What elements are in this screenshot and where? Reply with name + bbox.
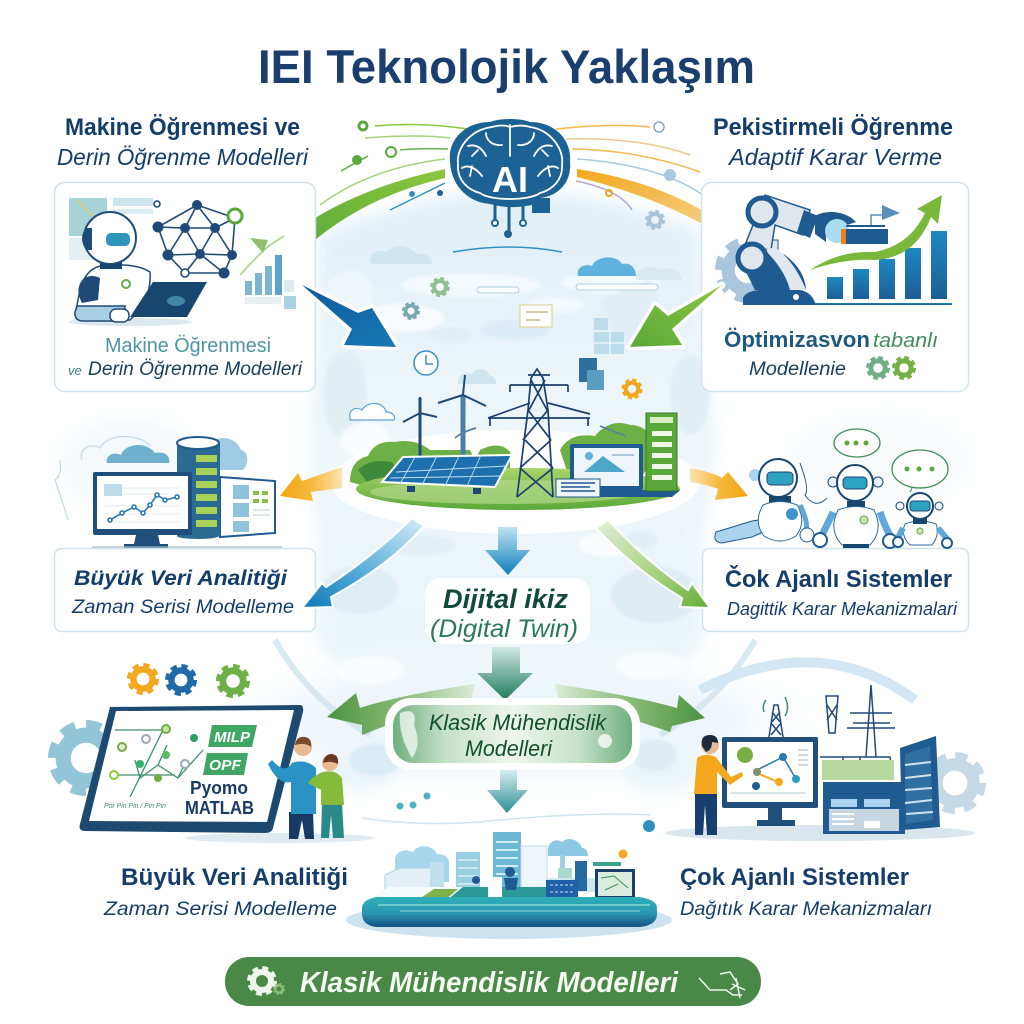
heading: reinforcement learning bbox=[713, 114, 953, 170]
illustration: grid operations desk bbox=[665, 685, 980, 841]
card text: modelling: Modellenie bbox=[749, 359, 846, 380]
buildings bbox=[385, 832, 635, 900]
MILP badge: MILP bbox=[214, 729, 251, 746]
bottom left caption bbox=[103, 864, 348, 920]
icons: clock, cloud, sun, docs above center scene bbox=[350, 351, 640, 420]
footer text: Klasik Mühendislik Modelleri bbox=[300, 967, 679, 999]
robot 1 bbox=[715, 459, 814, 543]
arrow: wide green to left bbox=[327, 684, 475, 735]
title: IEI Teknolojik Yaklaşım bbox=[258, 40, 755, 93]
panel: multi-agent card: Dagittik Karar Mekanizmalari bbox=[727, 599, 958, 619]
towers bbox=[763, 685, 895, 778]
icons: twin gears bbox=[868, 358, 914, 378]
connector lines around brain bbox=[320, 122, 703, 210]
pale gear bbox=[930, 758, 980, 808]
tablet bbox=[80, 705, 303, 833]
panel: big data card: Büyük Veri Analitiği bbox=[74, 567, 288, 590]
speech bubble bbox=[892, 450, 948, 492]
bushes bbox=[350, 423, 658, 490]
people bbox=[185, 737, 375, 843]
panel: machine learning card bbox=[54, 182, 316, 392]
field tile bbox=[362, 887, 463, 905]
illustration: optimization tablet bbox=[56, 666, 375, 843]
arrow: orange to big data bbox=[280, 467, 342, 501]
dashboard backdrop bbox=[69, 198, 153, 260]
card subtitle: Derin Öğrenme Modelleri bbox=[88, 359, 303, 380]
bar chart: growth bbox=[743, 231, 952, 305]
arrow: wide green to right bbox=[555, 684, 705, 732]
solar panel bbox=[382, 455, 512, 494]
card subtitle: ve bbox=[68, 363, 82, 378]
panel: big data card bbox=[54, 548, 316, 632]
arrow: blue curved to big data bbox=[302, 518, 424, 608]
panel: big data illustration bbox=[55, 436, 282, 549]
card text: optimization: tabanlı bbox=[873, 330, 938, 352]
arrow: orange to multi-agent bbox=[690, 468, 748, 500]
green arc left bbox=[315, 169, 445, 240]
bar chart: mini bbox=[240, 236, 296, 309]
panel: big data card: Zaman Serisi Modelleme bbox=[71, 597, 294, 618]
icon: footer tools bbox=[699, 972, 745, 998]
illustration: smart city platform bbox=[346, 832, 672, 939]
panel: classic engineering models pill bbox=[385, 698, 640, 770]
heading: reinforcement learning: Pekistirmeli Öğrenme bbox=[713, 114, 953, 141]
bottom left caption: Büyük Veri Analitiği bbox=[121, 864, 348, 891]
gears row bbox=[130, 666, 247, 695]
arrow: blue down to digital twin bbox=[485, 527, 530, 575]
heading: machine learning: Derin Öğrenme Modelleri bbox=[57, 144, 309, 170]
ground bbox=[356, 468, 680, 510]
robot 3 bbox=[893, 493, 952, 548]
icons: three collaborating robots bbox=[715, 429, 952, 548]
background: central pale globe bbox=[60, 192, 970, 795]
arrow: teal down to city bbox=[487, 770, 528, 813]
bottom left caption: Zaman Serisi Modelleme bbox=[103, 899, 337, 920]
robot 2 bbox=[813, 465, 897, 548]
arrow: green down to classic models bbox=[477, 647, 533, 700]
panel: reinforcement learning card bbox=[702, 182, 968, 392]
people bbox=[472, 867, 518, 899]
center scene: energy island bbox=[350, 369, 680, 510]
background clouds and small icons under brain bbox=[370, 212, 682, 354]
heading: reinforcement learning: Adaptif Karar Verme bbox=[727, 144, 942, 170]
MILP badge bbox=[208, 725, 257, 747]
turbine 2 bbox=[438, 375, 486, 456]
panel: classic engineering models pill: Klasik Mühendislik bbox=[429, 710, 607, 735]
icon: AI brain: AI bbox=[492, 159, 528, 200]
footer banner bbox=[225, 957, 761, 1006]
icon: robot with laptop bbox=[68, 212, 207, 326]
laptop and data block bbox=[556, 444, 680, 497]
monitor with line chart bbox=[93, 472, 192, 548]
rack bbox=[220, 477, 275, 537]
monitor with network bbox=[722, 737, 818, 826]
arrow: green curved to multi-agent bbox=[596, 520, 710, 608]
decorative nodes above city bbox=[362, 792, 655, 858]
speech bubble bbox=[834, 429, 880, 457]
icon: robot arm bbox=[738, 195, 900, 305]
teal plaza bbox=[445, 887, 546, 898]
bottom right caption bbox=[680, 864, 932, 920]
orange arc right bbox=[577, 169, 705, 225]
center scene: white halo bbox=[330, 430, 700, 534]
icon: neural network bbox=[152, 200, 242, 278]
MATLAB label: MATLAB bbox=[185, 798, 254, 818]
panel: multi-agent card bbox=[702, 548, 968, 632]
Pyomo label: Pyomo bbox=[190, 778, 248, 798]
icon: AI brain bbox=[450, 119, 570, 252]
terminal box bbox=[823, 782, 905, 834]
platform bbox=[362, 897, 657, 927]
panel: multi-agent card: Čok Ajanlı Sistemler bbox=[725, 565, 952, 593]
pale gear bbox=[56, 728, 116, 788]
label: digital twin: Dijital ikiz bbox=[443, 584, 568, 614]
arrow: growth trend bbox=[810, 195, 942, 270]
server cylinder bbox=[177, 437, 220, 539]
transmission tower bbox=[455, 369, 626, 497]
OPF badge: OPF bbox=[209, 757, 242, 774]
arrow: green into twin from top right bbox=[630, 285, 722, 347]
label: digital twin bbox=[425, 578, 590, 644]
person bbox=[694, 735, 743, 835]
network graph bbox=[110, 725, 203, 797]
green status rack bbox=[646, 413, 677, 491]
heading: machine learning: Makine Öğrenmesi ve bbox=[65, 114, 300, 141]
bottom right caption: Dağıtık Karar Mekanizmaları bbox=[680, 899, 932, 920]
card text: optimization bbox=[724, 327, 938, 352]
card text: optimization: Öptimizasvon bbox=[724, 327, 870, 352]
card text: Makine Öğrenmesi bbox=[105, 335, 271, 357]
OPF badge bbox=[203, 753, 248, 775]
turbine 1 bbox=[403, 397, 437, 468]
panel: classic engineering models pill: Modelleri bbox=[465, 736, 553, 761]
icon: pale gear behind arm bbox=[722, 244, 774, 296]
clouds bbox=[55, 436, 247, 520]
heading: machine learning bbox=[57, 114, 309, 170]
bottom right caption: Çok Ajanlı Sistemler bbox=[680, 864, 909, 891]
arrow: blue into twin from top left bbox=[302, 285, 396, 347]
illustration: optimization tablet: Por Pin Pin / Pin Pin bbox=[104, 803, 166, 810]
icon: white gear bbox=[250, 969, 284, 994]
server cabinet bbox=[900, 736, 940, 830]
label: digital twin: (Digital Twin) bbox=[430, 615, 578, 643]
